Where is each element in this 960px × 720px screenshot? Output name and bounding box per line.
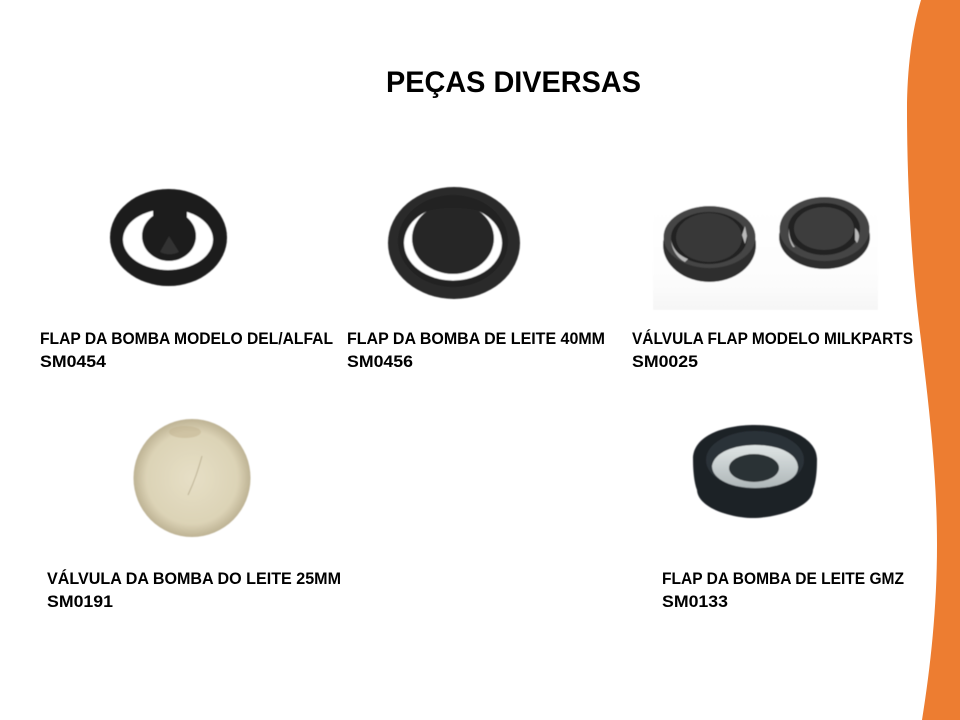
label: SM0454: SM0454 xyxy=(40,353,107,371)
title: PEÇAS DIVERSAS xyxy=(386,66,641,99)
label: SM0456: FLAP DA BOMBA DE LEITE 40MM xyxy=(347,330,605,348)
label: SM0025: VÁLVULA FLAP MODELO MILKPARTS xyxy=(632,329,913,348)
icon: flap SM0133 xyxy=(693,425,817,518)
icon: flap SM0454 xyxy=(110,189,227,286)
label: SM0191 xyxy=(47,569,341,611)
label: SM0454: FLAP DA BOMBA MODELO DEL/ALFAL xyxy=(40,330,333,348)
label: SM0191: SM0191 xyxy=(47,593,113,611)
label: SM0025 xyxy=(632,329,913,371)
label: SM0191: VÁLVULA DA BOMBA DO LEITE 25MM xyxy=(47,569,341,588)
label: SM0456 xyxy=(347,330,605,371)
icon: cream ball valve SM0191 xyxy=(134,419,250,537)
label: SM0454 xyxy=(40,330,333,371)
decorative orange wave band xyxy=(907,0,960,720)
label: SM0133: SM0133 xyxy=(662,593,728,611)
icon: flap SM0456 xyxy=(388,187,520,299)
label: SM0133 xyxy=(662,570,904,611)
label: SM0025: SM0025 xyxy=(632,353,698,371)
label: SM0456: SM0456 xyxy=(347,353,413,371)
label: SM0133: FLAP DA BOMBA DE LEITE GMZ xyxy=(662,570,904,588)
icon: valve pair SM0025 xyxy=(653,190,878,310)
